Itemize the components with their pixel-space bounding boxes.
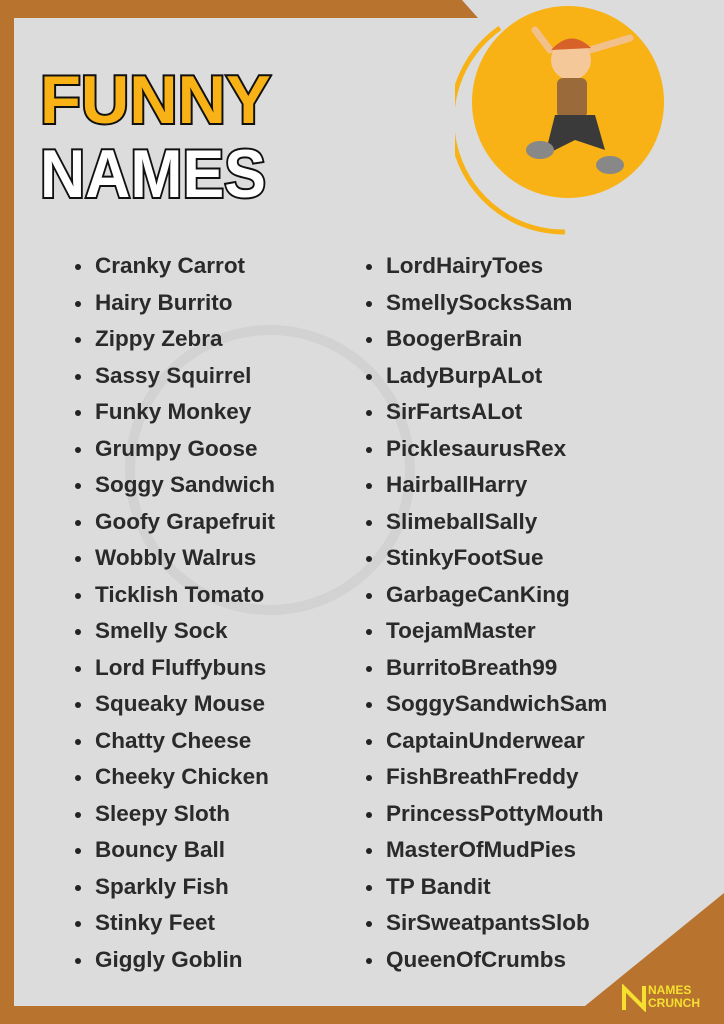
list: column 1: Cranky Carrot	[95, 253, 245, 278]
list: column 2: LadyBurpALot	[386, 362, 542, 388]
illustration: boy in yellow circle	[455, 6, 664, 234]
list: column 1	[75, 253, 275, 972]
list: column 1: Bouncy Ball	[95, 837, 225, 862]
list: column 2: HairballHarry	[386, 472, 527, 497]
logo: NAMES	[648, 983, 691, 997]
list: column 2: GarbageCanKing	[386, 582, 570, 606]
list: column 1: Cheeky Chicken	[95, 764, 269, 789]
list: column 1: Zippy Zebra	[95, 326, 223, 351]
list: column 2: SirFartsALot	[386, 399, 522, 424]
list: column 2: SirSweatpantsSlob	[386, 910, 590, 935]
list: column 1: Soggy Sandwich	[95, 472, 275, 497]
list: column 1: Ticklish Tomato	[95, 582, 264, 606]
list: column 2: FishBreathFreddy	[386, 764, 579, 789]
title: FUNNY	[40, 62, 271, 138]
list: column 2: SlimeballSally	[386, 508, 537, 534]
list: column 1: Chatty Cheese	[95, 728, 251, 752]
list: column 2: MasterOfMudPies	[386, 837, 576, 862]
list: column 1: Funky Monkey	[95, 399, 251, 424]
list: column 2: StinkyFootSue	[386, 545, 544, 570]
list: column 1: Stinky Feet	[95, 910, 215, 935]
list: column 2	[366, 253, 607, 972]
list: column 2: PrincessPottyMouth	[386, 800, 604, 826]
list: column 1: Sparkly Fish	[95, 874, 229, 898]
list: column 2: TP Bandit	[386, 874, 491, 898]
list: column 2: SoggySandwichSam	[386, 691, 607, 716]
logo: CRUNCH	[648, 996, 700, 1010]
list: column 2: PicklesaurusRex	[386, 436, 566, 460]
list: column 2: LordHairyToes	[386, 253, 543, 278]
list: column 1: Goofy Grapefruit	[95, 508, 275, 534]
list: column 2: BoogerBrain	[386, 326, 522, 351]
logo	[622, 983, 700, 1012]
list: column 2: QueenOfCrumbs	[386, 946, 566, 972]
list: column 1: Hairy Burrito	[95, 290, 233, 314]
title: NAMES	[40, 136, 266, 212]
list: column 1: Giggly Goblin	[95, 946, 242, 972]
list: column 1: Smelly Sock	[95, 618, 228, 643]
list: column 1: Lord Fluffybuns	[95, 654, 266, 680]
list: column 1: Sleepy Sloth	[95, 800, 230, 826]
title	[40, 62, 272, 212]
list: column 1: Grumpy Goose	[95, 436, 258, 460]
list: column 1: Sassy Squirrel	[95, 362, 251, 388]
list: column 2: SmellySocksSam	[386, 290, 572, 314]
list: column 2: BurritoBreath99	[386, 654, 557, 680]
list: column 1: Wobbly Walrus	[95, 545, 256, 570]
list: column 1: Squeaky Mouse	[95, 691, 265, 716]
list: column 2: ToejamMaster	[386, 618, 536, 643]
list: column 2: CaptainUnderwear	[386, 728, 585, 752]
